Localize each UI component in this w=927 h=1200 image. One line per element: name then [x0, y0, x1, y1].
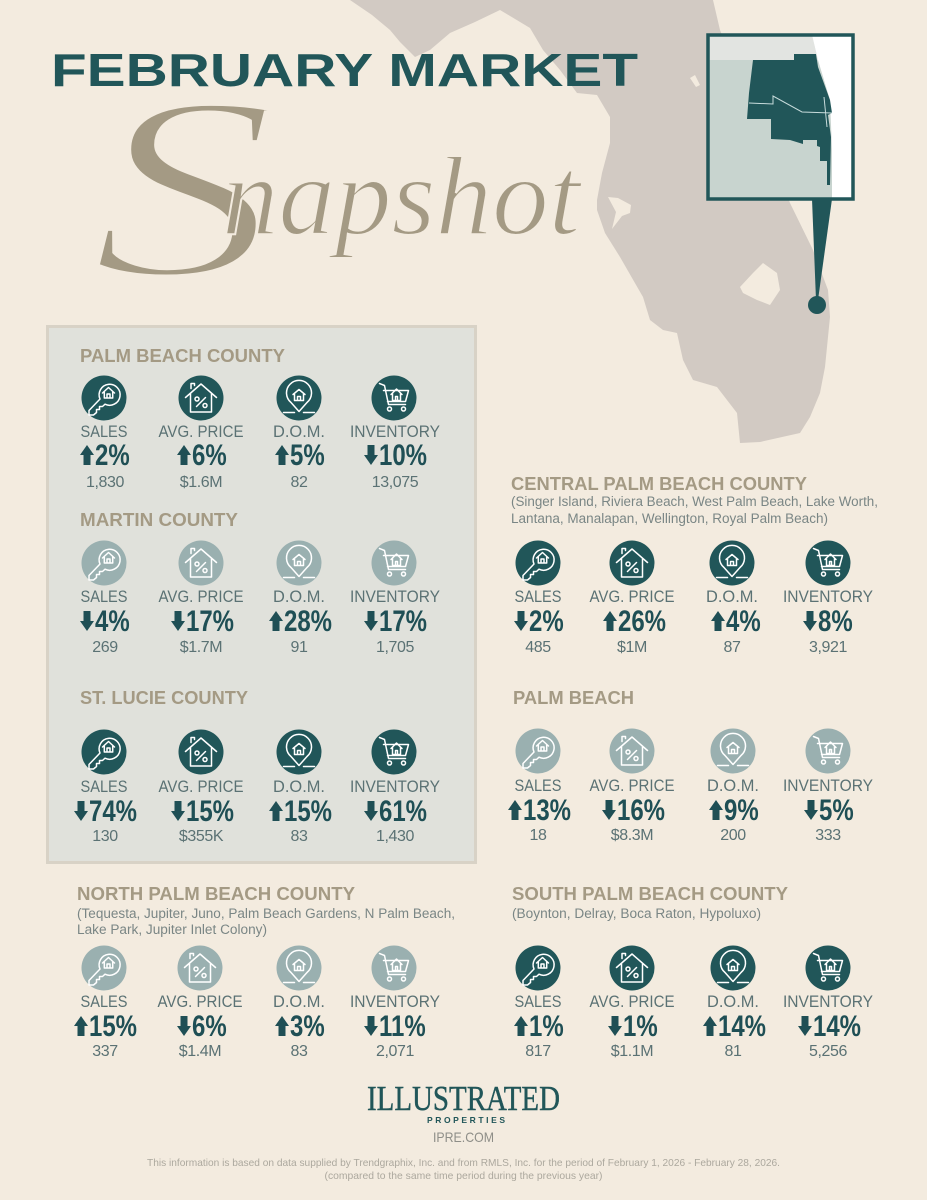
- metric: days on market: D.O.M.: [707, 993, 759, 1011]
- metric: average price: AVG. PRICE: [590, 777, 674, 795]
- metric: sales: SALES: [80, 423, 128, 441]
- metric: sales: [74, 946, 137, 1060]
- logo: Illustrated Properties: PROPERTIES: [427, 1115, 505, 1125]
- heading: SOUTH PALM BEACH COUNTY: [512, 883, 789, 904]
- metric: sales: 2%: [529, 603, 564, 638]
- metric: inventory: 13,075: [372, 474, 419, 491]
- metric: average price: [590, 946, 674, 1060]
- metric: inventory: INVENTORY: [350, 423, 440, 441]
- metric: average price: $1.7M: [180, 639, 222, 656]
- section: Martin County: [80, 509, 440, 656]
- metric: days on market: [703, 946, 766, 1060]
- disclaimer: [147, 1157, 780, 1182]
- area list: [511, 494, 878, 526]
- metric: inventory: 17%: [379, 603, 427, 638]
- metric: days on market: [269, 540, 332, 656]
- metric: days on market: 14%: [718, 1008, 766, 1043]
- metric: inventory: 11%: [379, 1008, 426, 1043]
- metric: inventory: 3,921: [809, 639, 848, 656]
- metric: days on market: 87: [724, 639, 741, 656]
- metric: inventory: 1,705: [376, 639, 415, 656]
- metric: average price: 15%: [186, 793, 234, 828]
- metric: sales: 18: [530, 827, 547, 844]
- section: Palm Beach: [508, 687, 873, 844]
- metric: days on market: [273, 946, 325, 1060]
- metric: sales: 130: [92, 828, 118, 845]
- section: Palm Beach County: [80, 345, 440, 491]
- panel: counties: [48, 326, 476, 862]
- metric: average price: $355K: [179, 828, 224, 845]
- section: South Palm Beach County: [512, 883, 873, 1060]
- metric: sales: 1%: [529, 1008, 564, 1043]
- metric: inventory: INVENTORY: [783, 588, 873, 606]
- metric: sales: 15%: [89, 1008, 137, 1043]
- metric: average price: 17%: [186, 603, 234, 638]
- metric: average price: AVG. PRICE: [158, 588, 244, 606]
- metric: sales: 13%: [523, 792, 571, 827]
- metric: inventory: 2,071: [376, 1043, 415, 1060]
- metric: average price: [158, 540, 244, 656]
- metric: average price: AVG. PRICE: [590, 993, 674, 1011]
- metric: inventory: [783, 946, 873, 1060]
- metric: days on market: 83: [290, 1043, 308, 1060]
- metric: days on market: D.O.M.: [273, 993, 325, 1011]
- section: North Palm Beach County: [74, 883, 455, 1060]
- title: FEBRUARY MARKET: [51, 44, 638, 96]
- metric: average price: 6%: [192, 437, 227, 472]
- metric: days on market: D.O.M.: [273, 778, 325, 796]
- metric: average price: 1%: [623, 1008, 658, 1043]
- metric: sales: 817: [525, 1043, 551, 1060]
- metric: inventory: [783, 540, 873, 656]
- metric: average price: [158, 730, 244, 845]
- metric: sales: [508, 728, 571, 844]
- logo: Illustrated Properties: ILLUSTRATED: [367, 1079, 560, 1118]
- metric: average price: 6%: [192, 1008, 227, 1043]
- heading: PALM BEACH: [513, 687, 634, 708]
- metric: inventory: INVENTORY: [783, 777, 873, 795]
- metric: days on market: 15%: [284, 793, 332, 828]
- metric: inventory: INVENTORY: [783, 993, 873, 1011]
- script heading: Snapshot: napshot: [222, 135, 583, 259]
- locator inset map: [708, 35, 853, 199]
- metric: sales: 337: [92, 1043, 118, 1060]
- metric: days on market: 28%: [284, 603, 332, 638]
- metric: inventory: 333: [815, 827, 841, 844]
- metric: sales: [80, 376, 130, 491]
- metric: days on market: 83: [290, 828, 308, 845]
- disclaimer: This information is based on data supplied by Trendgraphix, Inc. and from RMLS, Inc. for the period of February 1, 2026 - February 28, 2026.: [147, 1157, 780, 1169]
- metric: sales: SALES: [80, 778, 128, 796]
- metric: days on market: 5%: [290, 437, 325, 472]
- metric: inventory: 5%: [819, 792, 854, 827]
- area list: (Boynton, Delray, Boca Raton, Hypoluxo): [512, 906, 761, 921]
- metric: inventory: INVENTORY: [350, 778, 440, 796]
- metric: days on market: 200: [720, 827, 746, 844]
- metric: sales: SALES: [514, 588, 562, 606]
- metric: average price: AVG. PRICE: [158, 993, 242, 1011]
- metric: days on market: D.O.M.: [706, 588, 758, 606]
- heading: NORTH PALM BEACH COUNTY: [77, 883, 356, 904]
- metric: sales: 1,830: [86, 474, 125, 491]
- metric: average price: $1.6M: [180, 474, 222, 491]
- heading: MARTIN COUNTY: [80, 509, 239, 530]
- metric: average price: $1M: [617, 639, 647, 656]
- metric: sales: [514, 540, 564, 656]
- metric: sales: [514, 946, 564, 1060]
- metric: days on market: D.O.M.: [707, 777, 759, 795]
- metric: sales: 2%: [95, 437, 130, 472]
- metric: days on market: 81: [724, 1043, 742, 1060]
- area list: (Singer Island, Riviera Beach, West Palm Beach, Lake Worth,: [511, 494, 878, 509]
- metric: sales: SALES: [514, 777, 562, 795]
- metric: days on market: [707, 728, 759, 844]
- area list: [77, 906, 455, 937]
- metric: sales: 74%: [89, 793, 137, 828]
- metric: sales: SALES: [80, 588, 128, 606]
- metric: average price: AVG. PRICE: [158, 423, 244, 441]
- map: Florida silhouette: [350, 0, 830, 443]
- metric: sales: 4%: [95, 603, 130, 638]
- map pointer: [808, 199, 832, 314]
- disclaimer: (compared to the same time period during the previous year): [324, 1170, 602, 1182]
- metric: average price: [158, 946, 242, 1060]
- metric: inventory: [783, 728, 873, 844]
- metric: average price: $1.4M: [179, 1043, 221, 1060]
- metric: days on market: [706, 540, 761, 656]
- script heading: Snapshot: S: [91, 44, 275, 332]
- metric: inventory: INVENTORY: [350, 993, 440, 1011]
- metric: sales: [80, 540, 130, 656]
- metric: average price: AVG. PRICE: [590, 588, 674, 606]
- metric: inventory: INVENTORY: [350, 588, 440, 606]
- metric: inventory: 1,430: [376, 828, 415, 845]
- heading: ST. LUCIE COUNTY: [80, 687, 249, 708]
- metric: average price: $8.3M: [611, 827, 653, 844]
- script heading: Snapshot: [91, 44, 583, 332]
- metric: days on market: 4%: [726, 603, 761, 638]
- metric: average price: 16%: [617, 792, 665, 827]
- metric: days on market: [273, 376, 325, 491]
- metric: days on market: D.O.M.: [273, 588, 325, 606]
- metric: days on market: 82: [290, 474, 308, 491]
- metric: inventory: [350, 946, 440, 1060]
- metric: inventory: 5,256: [809, 1043, 848, 1060]
- metric: average price: AVG. PRICE: [158, 778, 244, 796]
- metric: inventory: [350, 730, 440, 845]
- metric: days on market: 91: [290, 639, 308, 656]
- section: Central Palm Beach County: [511, 473, 878, 656]
- metric: sales: 269: [92, 639, 118, 656]
- metric: inventory: [350, 376, 440, 491]
- metric: days on market: [269, 730, 332, 845]
- metric: sales: [74, 730, 137, 845]
- metric: inventory: 10%: [379, 437, 427, 472]
- metric: sales: SALES: [80, 993, 128, 1011]
- metric: sales: SALES: [514, 993, 562, 1011]
- metric: inventory: 8%: [818, 603, 853, 638]
- metric: days on market: 3%: [290, 1008, 325, 1043]
- metric: average price: [590, 728, 674, 844]
- metric: average price: [158, 376, 244, 491]
- metric: days on market: 9%: [724, 792, 759, 827]
- metric: inventory: 14%: [813, 1008, 861, 1043]
- metric: average price: [590, 540, 674, 656]
- metric: average price: 26%: [618, 603, 666, 638]
- area list: (Tequesta, Jupiter, Juno, Palm Beach Gardens, N Palm Beach,: [77, 906, 455, 921]
- metric: inventory: [350, 540, 440, 656]
- heading: CENTRAL PALM BEACH COUNTY: [511, 473, 808, 494]
- metric: days on market: D.O.M.: [273, 423, 325, 441]
- metric: sales: 485: [525, 639, 551, 656]
- heading: PALM BEACH COUNTY: [80, 345, 286, 366]
- website: IPRE.COM: [433, 1129, 494, 1145]
- metric: average price: $1.1M: [611, 1043, 653, 1060]
- metric: inventory: 61%: [379, 793, 427, 828]
- area list: Lake Park, Jupiter Inlet Colony): [77, 922, 267, 937]
- section: St. Lucie County: [74, 687, 440, 845]
- area list: Lantana, Manalapan, Wellington, Royal Palm Beach): [511, 511, 828, 526]
